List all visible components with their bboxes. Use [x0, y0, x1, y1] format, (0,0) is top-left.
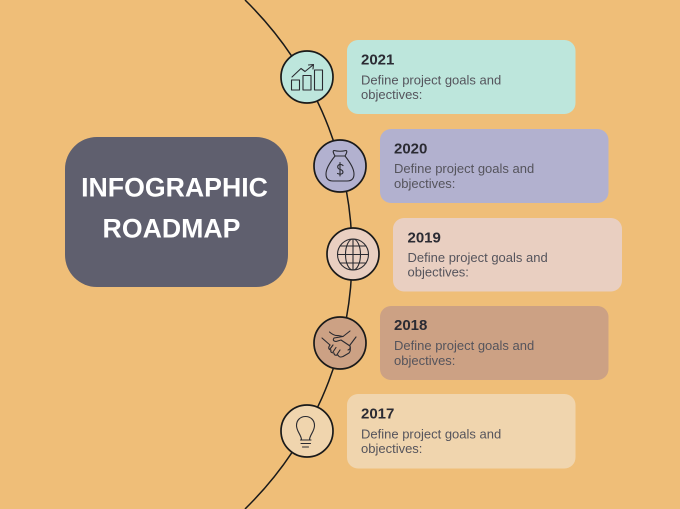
- panel: title: [65, 137, 288, 287]
- panel: 2020: 2020: [394, 140, 427, 158]
- panel: 2018: Define project goals and: [394, 338, 534, 353]
- icon: money bag: [314, 140, 366, 192]
- panel: 2018: [380, 306, 608, 380]
- heading: roadmap: ROADMAP: [103, 214, 240, 244]
- panel: 2019: [393, 218, 622, 292]
- panel: 2020: [380, 129, 608, 203]
- panel: 2021: Define project goals and: [361, 72, 501, 88]
- panel: 2019: objectives:: [408, 264, 469, 280]
- icon: light bulb: [281, 405, 333, 457]
- panel: 2017: [347, 394, 576, 468]
- panel: 2019: Define project goals and: [408, 250, 548, 265]
- icon: handshake: [314, 317, 366, 369]
- panel: 2017: Define project goals and: [361, 426, 501, 442]
- panel: 2018: 2018: [394, 317, 427, 334]
- panel: 2021: objectives:: [361, 87, 422, 102]
- panel: 2021: 2021: [361, 52, 394, 68]
- timeline arc: [245, 0, 352, 509]
- panel: 2018: objectives:: [394, 353, 455, 368]
- panel: 2020: Define project goals and: [394, 161, 534, 176]
- panel: 2019: 2019: [408, 230, 441, 246]
- panel: 2020: objectives:: [394, 176, 455, 191]
- icon: growth chart: [281, 51, 333, 103]
- panel: 2017: objectives:: [361, 441, 422, 456]
- panel: 2017: 2017: [361, 406, 394, 422]
- heading: infographic: INFOGRAPHIC: [81, 172, 268, 202]
- panel: 2021: [347, 40, 576, 114]
- icon: globe: [327, 228, 379, 280]
